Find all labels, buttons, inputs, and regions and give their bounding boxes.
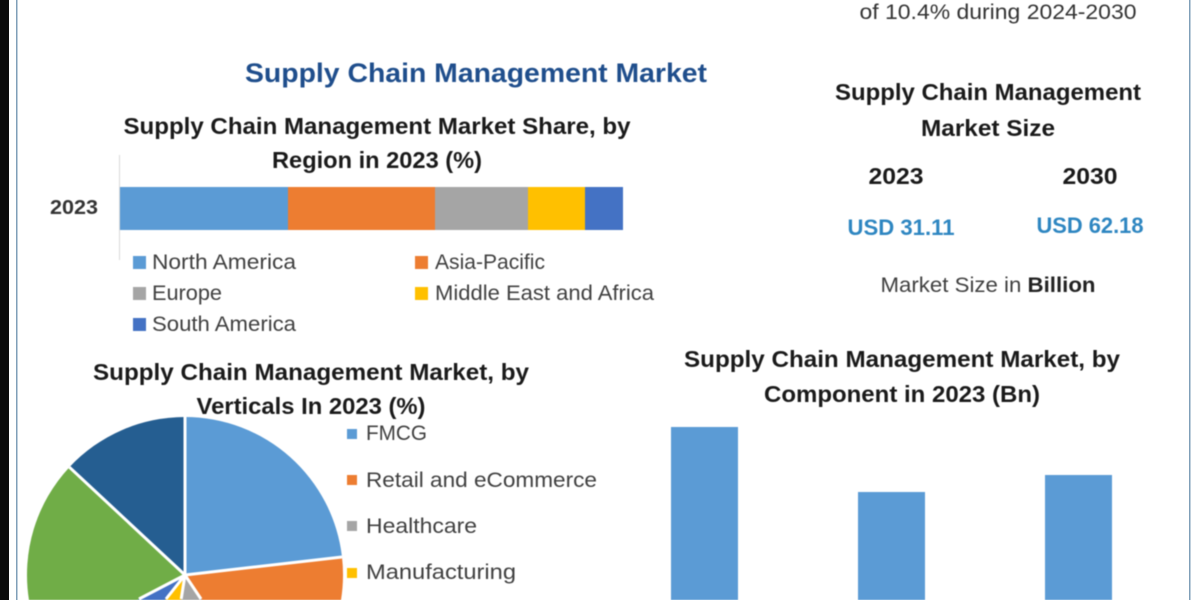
market values: USD 31.11 — [848, 215, 954, 240]
panel: by component — [671, 346, 1120, 600]
heading: component: Supply Chain Management Market, by — [684, 346, 1120, 372]
legend: regions: Asia-Pacific — [435, 251, 545, 274]
heading: region share: Supply Chain Management Market Share, by — [124, 113, 631, 139]
stacked bar chart — [50, 155, 623, 260]
years — [868, 163, 1118, 189]
legend: verticals — [347, 422, 597, 584]
legend: regions: Europe — [152, 282, 222, 305]
pie chart — [27, 417, 343, 600]
years: 2030 — [1062, 163, 1118, 189]
legend: verticals: Retail and eCommerce — [366, 469, 597, 492]
heading: component: Component in 2023 (Bn) — [764, 381, 1040, 407]
heading: verticals: Verticals In 2023 (%) — [196, 393, 426, 419]
legend: verticals: Manufacturing — [366, 561, 516, 584]
legend: regions — [133, 251, 654, 336]
left black strip — [0, 0, 9, 600]
legend: regions: South America — [152, 313, 296, 336]
heading: market size: Supply Chain Management — [835, 79, 1141, 105]
heading: market size — [835, 79, 1141, 141]
heading: region share: Region in 2023 (%) — [272, 147, 482, 173]
panel: market size — [835, 79, 1144, 297]
heading: region share — [124, 113, 631, 173]
legend: verticals: Healthcare — [366, 515, 477, 538]
legend: regions: North America — [152, 251, 296, 274]
years: 2023 — [868, 163, 924, 189]
heading: verticals — [93, 359, 529, 419]
heading: component — [684, 346, 1120, 407]
legend: regions: Middle East and Africa — [435, 282, 654, 305]
panel: market share by region — [50, 113, 654, 336]
top growth text: of 10.4% during 2024-2030 — [860, 1, 1136, 24]
panel: verticals — [27, 359, 597, 600]
heading: market size: Market Size — [921, 115, 1055, 141]
stacked bar chart: 2023 — [50, 197, 98, 219]
legend: verticals: FMCG — [366, 422, 427, 445]
column chart — [671, 427, 1112, 600]
market values — [848, 213, 1144, 240]
market values: USD 62.18 — [1036, 213, 1144, 238]
heading: verticals: Supply Chain Management Market, by — [93, 359, 529, 385]
title: Supply Chain Management Market — [245, 58, 707, 88]
unit note: Market Size in Billion — [880, 274, 1096, 297]
